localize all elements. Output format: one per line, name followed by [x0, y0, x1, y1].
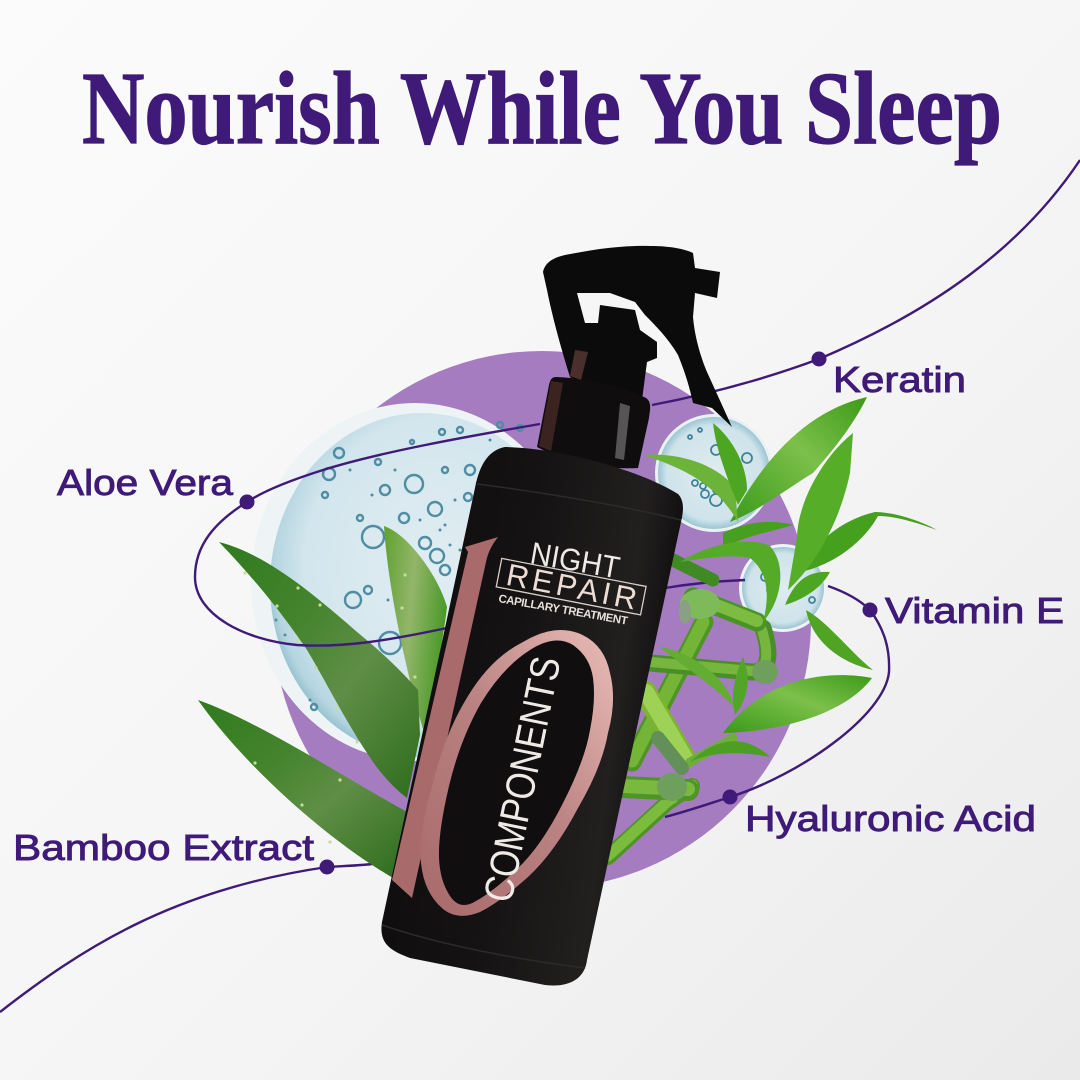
callout: Aloe Vera: Aloe Vera	[57, 462, 234, 503]
shoulder seam and base ring	[382, 484, 681, 968]
large gel droplet with bubbles	[251, 403, 579, 761]
connector line: Vitamin E and Hyaluronic Acid	[665, 580, 889, 817]
bamboo leaf: upper narrow	[713, 423, 747, 505]
neck highlight	[570, 350, 588, 380]
bamboo leaf: thin tip	[800, 512, 937, 572]
bamboo leaf: right drooping	[806, 610, 873, 670]
aloe vera leaves	[198, 526, 447, 878]
pump collar	[537, 377, 650, 468]
bamboo leaf: tall center	[788, 433, 853, 590]
aloe leaf: middle	[219, 542, 420, 798]
callout: Vitamin E: Vitamin E	[885, 590, 1064, 631]
connector line: Bamboo Extract	[0, 864, 372, 1012]
bamboo leaf: side	[723, 522, 793, 548]
callout: Bamboo Extract: Bamboo Extract	[13, 827, 314, 868]
aloe leaf: front	[198, 700, 407, 878]
numeral one	[392, 537, 498, 898]
bottle body	[381, 447, 683, 986]
callout: Keratin	[812, 352, 966, 400]
small gel droplets	[655, 414, 827, 632]
bamboo leaf: upper left	[643, 455, 738, 522]
callout: Hyaluronic Acid	[722, 790, 1036, 839]
callout: Hyaluronic Acid: Hyaluronic Acid	[745, 798, 1036, 839]
product bottle	[381, 246, 732, 986]
bamboo plant	[608, 397, 937, 857]
bamboo leaf: small	[785, 572, 830, 605]
bamboo leaf: big top	[730, 397, 867, 522]
label: capillary treatment: CAPILLARY TREATMENT	[497, 593, 629, 628]
bamboo knuckles	[680, 589, 720, 619]
aloe leaf: back	[384, 526, 447, 732]
callout: Aloe Vera	[57, 462, 254, 510]
bamboo leaf: lower narrow	[733, 657, 748, 715]
aloe leaf spots	[243, 571, 417, 844]
bamboo leaf: curl	[680, 541, 780, 622]
bamboo leaf: low side	[690, 741, 770, 762]
purple circle backdrop	[273, 351, 811, 889]
numeral zero	[420, 630, 613, 916]
connector line: Keratin	[652, 160, 1080, 405]
label: night: NIGHT	[528, 535, 623, 586]
collar highlight	[615, 403, 630, 460]
label: components: COMPONENTS	[475, 653, 569, 906]
bamboo leaf: lower left	[660, 647, 735, 708]
connector line: Aloe Vera	[195, 424, 540, 646]
label box: repair: REPAIR	[504, 557, 640, 617]
bamboo stalks	[608, 560, 768, 857]
collar warm edge	[539, 381, 563, 451]
callout: Keratin: Keratin	[833, 359, 966, 400]
bamboo leaf: lower big	[723, 675, 872, 733]
spray trigger	[543, 246, 732, 427]
callout: Bamboo Extract	[13, 827, 334, 874]
